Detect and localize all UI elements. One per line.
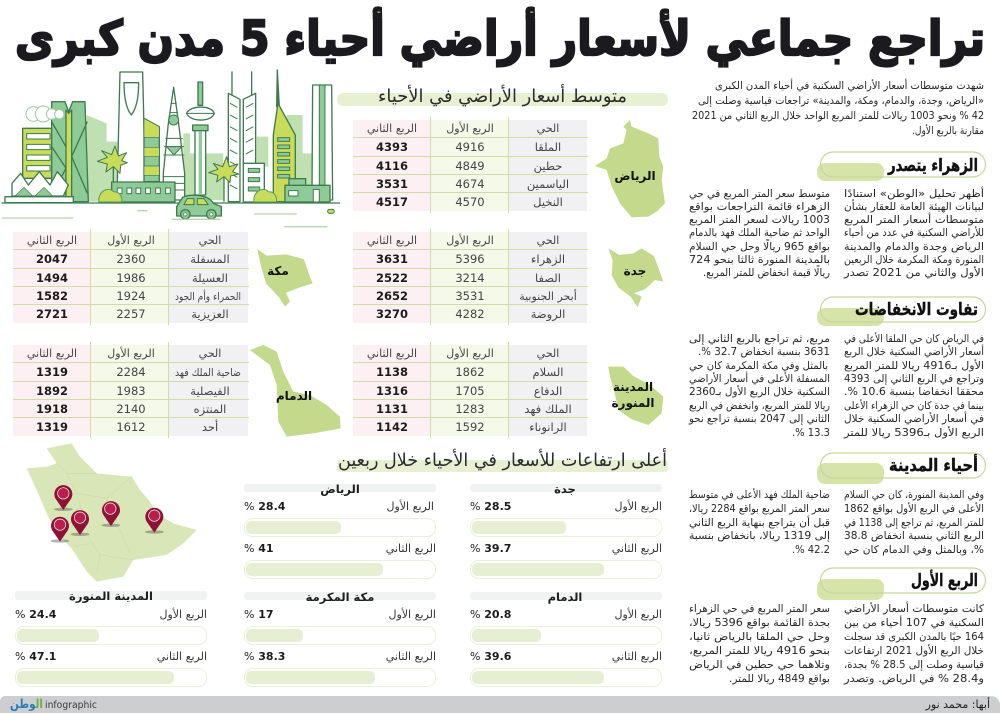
table: Jeddah: الربع الثاني xyxy=(367,234,417,247)
text block: المدينة left column: 42.2 %. xyxy=(792,544,830,556)
table: Riyadh: الربع الثاني xyxy=(367,122,417,135)
map: Madinah xyxy=(608,367,663,425)
text block: الربع الأول left column: بجدة القائمة بواقع 5396 ريالا، xyxy=(689,617,830,629)
table: Madinah: 1862 xyxy=(455,365,485,379)
text block: الزهراء right column xyxy=(843,186,984,279)
table: Madinah: الملك فهد xyxy=(524,402,572,416)
text block: المدينة right column: الربع الثاني بنسبة انخفاض 38.8 xyxy=(844,530,984,542)
map: Makkah xyxy=(257,249,313,307)
bar panel: Dammam: الربع الأول xyxy=(614,607,662,621)
text block: الانخفاضات right column: وتراجع في الربع الثاني إلى 4393 xyxy=(844,373,984,385)
text block: المدينة right column: وفي المدينة المنورة، كان حي السلام xyxy=(844,489,984,501)
table: Riyadh: الملقا xyxy=(535,140,561,154)
text block: الربع الأول right column: و28.4 % في الرياض. وتصدر xyxy=(843,673,984,685)
map: Saudi Arabia with location pins xyxy=(27,443,197,582)
bar panel: Madinah: % 24.4 xyxy=(15,608,57,621)
table: Dammam: 2284 xyxy=(116,365,146,379)
bar panel: Jeddah: الربع الأول xyxy=(614,499,662,513)
text block: المدينة right column: للمتر المربع، ثم تراجع إلى 1138 في xyxy=(844,517,984,529)
bar panel: Madinah: المدينة المنورة xyxy=(69,589,153,604)
table: Jeddah: 3270 xyxy=(376,307,408,321)
table: Jeddah: الصفا xyxy=(535,271,561,285)
table: Jeddah: 4282 xyxy=(455,307,485,321)
text block: الربع الأول left column: بنحو 4916 ريالا للمتر المربع، xyxy=(689,645,830,657)
bar panel: Riyadh: % 41 xyxy=(244,542,274,555)
table: Madinah: 1705 xyxy=(455,384,485,398)
table: Riyadh: 3531 xyxy=(376,177,408,191)
text block: الربع الأول left column xyxy=(689,603,830,685)
table: Madinah: الحي xyxy=(537,347,559,360)
table: Makkah: العسيلة xyxy=(192,271,228,285)
table: Riyadh: حطين xyxy=(534,159,562,174)
table: Dammam: الحي xyxy=(199,347,221,360)
text block: الزهراء right column: الرياض وجدة والدمام والمدينة xyxy=(844,241,984,253)
table: Makkah: 2047 xyxy=(36,252,68,266)
section heading: أحياء المدينة xyxy=(817,453,986,484)
table: Madinah: السلام xyxy=(533,365,563,379)
bar panel: Jeddah: جدة xyxy=(554,482,576,496)
table: Riyadh: 4674 xyxy=(455,177,485,191)
bar panel: Makkah: الربع الأول xyxy=(388,607,436,621)
bar panel: Jeddah: % 28.5 xyxy=(470,500,511,513)
bar panel: Jeddah: % 39.7 xyxy=(470,542,511,555)
table: Jeddah: الروضة xyxy=(531,307,565,322)
bar panel: Makkah: الربع الثاني xyxy=(386,650,436,663)
table: Dammam: 1319 xyxy=(36,365,68,379)
text block: الانخفاضات right column: محققا انخفاضا بنسبة 10.6 %. xyxy=(844,386,984,398)
text block: المدينة right column: %، وبالمثل وفي الدمام كان حي xyxy=(844,544,984,556)
bar panel: Makkah: % 17 xyxy=(244,608,274,621)
table: Dammam: 1918 xyxy=(36,402,68,416)
text block: الانخفاضات right column: الربع الأول بـ5396 ريالا للمتر xyxy=(843,426,984,439)
table: Riyadh: 4393 xyxy=(376,140,408,154)
text block: المدينة left column: سعر المتر المربع بواقع 2284 ريالا، xyxy=(689,503,830,515)
heading: highest rises: أعلى ارتفاعات للأسعار في الأحياء خلال ربعين xyxy=(338,448,667,471)
table: Dammam: 2140 xyxy=(116,402,146,416)
map: Jeddah: جدة xyxy=(624,264,646,278)
table: Riyadh: الحي xyxy=(537,122,559,135)
bar panel: Dammam: الدمام xyxy=(548,590,582,604)
table: Jeddah: أبحر الجنوبية xyxy=(519,289,577,303)
text block: الربع الأول left column: بواقع 4849 ريالا للمتر. xyxy=(729,673,830,685)
table: Makkah: الحمراء وأم الجود xyxy=(175,289,241,303)
section heading: الربع الأول xyxy=(817,568,986,600)
table: Madinah: 1283 xyxy=(455,402,485,416)
table: Jeddah: 5396 xyxy=(455,252,485,266)
logo: infographic xyxy=(45,700,97,711)
map: Dammam xyxy=(250,345,341,437)
text block: الربع الأول right column: 164 حيًا بالمدن الكبرى قد سجلت xyxy=(844,631,984,643)
section heading: الزهراء يتصدر: الزهراء يتصدر xyxy=(887,156,978,176)
text block: الانخفاضات left column: 3631 بنسبة انخفاض 32.7 %. xyxy=(698,346,830,358)
table: Dammam: 1892 xyxy=(36,384,68,398)
table: Makkah: العزيزية xyxy=(191,307,229,322)
text block: الانخفاضات left column: المسفلة الأعلى في أسعار الأراضي xyxy=(689,371,830,385)
text block: الانخفاضات left column: السكنية خلال الربع الأول بـ2360 xyxy=(689,385,830,398)
intro text: مقارنة بالربع الأول. xyxy=(912,124,984,137)
bar panel: Riyadh: الرياض xyxy=(320,482,360,496)
bar panel: Dammam: % 39.6 xyxy=(470,650,512,663)
text block: الانخفاضات left column xyxy=(688,333,830,439)
table: Makkah: 2360 xyxy=(116,252,146,266)
text block: الانخفاضات right column: في أسعار الأراضي السكنية خلال xyxy=(844,411,984,425)
table: Riyadh: الربع الأول xyxy=(446,121,494,135)
table: Madinah: الربع الثاني xyxy=(367,347,417,360)
text block: الربع الأول right column: قياسية وصلت إلى 28.5 % بجدة، xyxy=(844,659,984,671)
table: Makkah: 2721 xyxy=(36,307,68,321)
section heading: الربع الأول: الربع الأول xyxy=(911,570,978,591)
section heading: تفاوت الانخفاضات xyxy=(817,297,986,326)
icon: map pin Makkah xyxy=(71,510,89,536)
table: Riyadh: النخيل xyxy=(533,195,563,209)
table: Makkah: الربع الثاني xyxy=(27,234,77,247)
text block: الربع الأول left column: وتلاهما حي حطين في الرياض xyxy=(689,659,830,671)
table: Riyadh: 4916 xyxy=(455,140,485,154)
text block: المدينة left column: إلى 1319 ريالا، بانخفاض بنسبة xyxy=(689,530,830,542)
illustration: green city skyline xyxy=(2,70,340,227)
text block: المدينة left column xyxy=(689,488,830,556)
map: Dammam: الدمام xyxy=(276,389,312,404)
map: Jeddah xyxy=(608,248,663,307)
text block: المدينة right column: الأعلى في الربع الأول بواقع 1862 xyxy=(844,502,984,515)
text block: الانخفاضات left column: 13.3 %. xyxy=(792,427,830,439)
table: Makkah: المسفلة xyxy=(190,252,230,266)
table: Makkah: 2257 xyxy=(116,307,146,321)
table: Madinah: 1142 xyxy=(376,420,408,434)
table: Makkah: 1924 xyxy=(116,289,146,303)
text block: الزهراء left column: الواحد ثم ضاحية الملك فهد بالدمام xyxy=(689,227,830,239)
bar panel: Makkah: % 38.3 xyxy=(244,650,285,663)
table: Madinah: 1592 xyxy=(455,420,485,434)
table: Riyadh xyxy=(353,117,588,213)
text block: الانخفاضات right column xyxy=(843,332,984,439)
table: Madinah xyxy=(353,342,588,438)
heading: average land prices: متوسط أسعار الأراضي في الأحياء xyxy=(378,84,627,107)
intro text: شهدت متوسطات أسعار الأراضي السكنية في أحياء المدن الكبرى xyxy=(715,78,984,92)
table: Madinah: 1316 xyxy=(376,384,408,398)
text block: الانخفاضات left column: الثاني إلى 2047 بنسبة تراجع نحو xyxy=(688,413,830,425)
table: Madinah: الرانوناء xyxy=(529,420,567,435)
icon: map pin Riyadh xyxy=(102,501,120,527)
table: Dammam xyxy=(13,342,249,438)
text block: الربع الأول right column: خلال الربع الأول 2021 ارتفاعات xyxy=(844,644,984,657)
map: Madinah: المدينة xyxy=(613,380,653,394)
table: Jeddah: 2522 xyxy=(376,271,408,285)
intro text: 42 % ونحو 1003 ريالات للمتر المربع الواحد خلال الربع الثاني من 2021 xyxy=(692,110,984,122)
logo xyxy=(10,696,97,711)
bar panel: Dammam: % 20.8 xyxy=(470,608,511,621)
table: Dammam: 1612 xyxy=(116,420,146,434)
bar panel: Dammam: الربع الثاني xyxy=(612,650,662,663)
section heading: الزهراء يتصدر xyxy=(817,152,986,181)
table: Madinah: 1138 xyxy=(376,365,408,379)
text block: الربع الأول right column: السكنية في 107 أحياء من بين xyxy=(844,615,984,629)
table: Dammam: 1983 xyxy=(116,384,146,398)
text block: الانخفاضات left column: مربع، ثم تراجع بالربع الثاني إلى xyxy=(689,333,830,345)
table: Dammam: 1319 xyxy=(36,420,68,434)
table: Riyadh: 4849 xyxy=(455,159,485,173)
byline: أبها: محمد نور xyxy=(925,697,990,711)
bar panel: Dammam xyxy=(470,590,662,686)
text block: المدينة left column: ضاحية الملك فهد الأعلى في متوسط xyxy=(689,488,830,501)
table: Makkah: الحي xyxy=(199,234,221,247)
table: Jeddah: الربع الأول xyxy=(446,233,494,247)
table: Jeddah: 3531 xyxy=(455,289,485,303)
table: Dammam: الفيصلية xyxy=(190,384,230,398)
text block: الزهراء right column: لبيانات الهيئة العامة للعقار بشأن xyxy=(844,199,984,213)
text block: الربع الأول right column xyxy=(843,601,984,685)
table: Dammam: ضاحية الملك فهد xyxy=(175,367,241,379)
text block: الزهراء left column: متوسط سعر المتر المربع في حي xyxy=(689,188,830,200)
text block: الزهراء right column: للأراضي السكنية في عدد من أحياء xyxy=(844,225,984,239)
text block: الانخفاضات left column: ريالا للمتر المربع، وانخفض في الربع xyxy=(689,400,830,412)
text block: الزهراء left column: 1003 ريالات لسعر المتر المربع xyxy=(689,214,830,226)
map: Riyadh: الرياض xyxy=(614,169,656,183)
bar panel: Jeddah: الربع الثاني xyxy=(612,542,662,555)
bar panel: Makkah xyxy=(244,590,436,686)
table: Makkah: 1986 xyxy=(116,271,146,285)
bar panel: Riyadh xyxy=(244,482,436,578)
text block: الزهراء right column: المنورة ومكة المكرمة خلال الربعين xyxy=(844,254,984,266)
text block: الانخفاضات right column: أسعار الأراضي السكنية خلال الربع xyxy=(844,344,984,358)
map: Makkah: مكة xyxy=(267,264,289,278)
table: Riyadh: 4116 xyxy=(376,159,408,173)
table: Dammam: الربع الأول xyxy=(107,346,155,360)
text block: الزهراء right column: الأول والثاني من 2021 تصدر xyxy=(843,266,984,279)
table: Madinah: 1131 xyxy=(376,402,408,416)
table: Jeddah: 3631 xyxy=(376,252,408,266)
text block: المدينة left column: قبل أن يتراجع بنهاية الربع الثاني xyxy=(689,515,830,529)
table: Dammam: الربع الثاني xyxy=(27,347,77,360)
bar panel: Riyadh: الربع الأول xyxy=(386,499,434,513)
icon: map pin Jeddah xyxy=(51,517,69,543)
bar panel: Jeddah xyxy=(470,482,662,578)
table: Riyadh: الياسمين xyxy=(527,177,569,192)
bar panel: Riyadh: % 28.4 xyxy=(244,500,286,513)
table: Madinah: الربع الأول xyxy=(446,346,494,360)
text block: الانخفاضات left column: بالمثل وفي مكة المكرمة كان حي xyxy=(689,360,828,372)
icon: map pin Dammam xyxy=(145,508,164,534)
table: Jeddah: الزهراء xyxy=(531,252,565,267)
bar panel: Madinah xyxy=(15,589,207,686)
bar panel: Madinah: الربع الأول xyxy=(159,607,207,621)
text block: الزهراء left column: بالمدينة المنورة ثالثا بنحو 724 xyxy=(689,254,830,266)
text block: الزهراء right column: متوسطات أسعار المتر المربع xyxy=(844,212,984,226)
text block: الزهراء left column: الزهراء قائمة التراجعات بواقع xyxy=(689,201,830,213)
icon: car xyxy=(177,195,221,219)
table: Makkah: 1494 xyxy=(36,271,68,285)
table: Makkah: الربع الأول xyxy=(107,233,155,247)
map: Madinah: المنورة xyxy=(611,396,655,411)
map: Riyadh xyxy=(595,120,665,217)
table: Jeddah: 2652 xyxy=(376,289,408,303)
bar panel: Madinah: الربع الثاني xyxy=(157,650,207,663)
table: Jeddah: 3214 xyxy=(455,271,485,285)
text block: الزهراء left column xyxy=(689,188,830,279)
text block: المدينة right column xyxy=(844,489,984,556)
intro text xyxy=(692,78,984,137)
table: Makkah xyxy=(13,229,249,325)
text block: الزهراء right column: أظهر تحليل «الوطن» استنادًا xyxy=(844,186,984,200)
table: Riyadh: 4517 xyxy=(376,195,408,209)
table: Dammam: أحد xyxy=(202,419,218,434)
table: Madinah: الدفاع xyxy=(534,384,562,398)
text block: الانخفاضات right column: بينما في جدة كان حي الزهراء الأعلى xyxy=(844,399,984,412)
bar panel: Makkah: مكة المكرمة xyxy=(306,590,374,604)
table: Jeddah xyxy=(353,229,588,325)
bar panel: Riyadh: الربع الثاني xyxy=(386,542,436,555)
table: Riyadh: 4570 xyxy=(455,195,485,209)
icon: map pin Tabuk/Madinah xyxy=(54,485,73,511)
text block: الربع الأول left column: وحل حي الملقا بالرياض ثانيا، xyxy=(689,631,830,643)
text block: الربع الأول right column: كانت متوسطات أسعار الأراضي xyxy=(844,601,984,615)
table: Dammam: المنتزه xyxy=(194,402,226,417)
text block: الزهراء left column: بواقع 965 ريالًا وحل حي السلام xyxy=(689,239,830,253)
section heading: أحياء المدينة: أحياء المدينة xyxy=(889,454,978,476)
text block: الربع الأول left column: سعر المتر المربع في حي الزهراء xyxy=(689,603,830,615)
bar panel: Madinah: % 47.1 xyxy=(15,650,56,663)
table: Makkah: 1582 xyxy=(36,289,68,303)
text block: الانخفاضات right column: الأول بـ4916 ريالا للمتر المربع xyxy=(844,359,984,372)
table: Jeddah: الحي xyxy=(537,234,559,247)
text block: الزهراء left column: ريالًا قيمة انخفاض للمتر المربع. xyxy=(703,265,830,279)
logo: الوطن xyxy=(10,696,43,711)
heading: average land prices xyxy=(337,84,668,107)
intro text: «الرياض، وجدة، والدمام، ومكة، والمدينة» تراجعات قياسية وصلت إلى xyxy=(698,95,984,107)
footer bar xyxy=(0,696,1000,713)
